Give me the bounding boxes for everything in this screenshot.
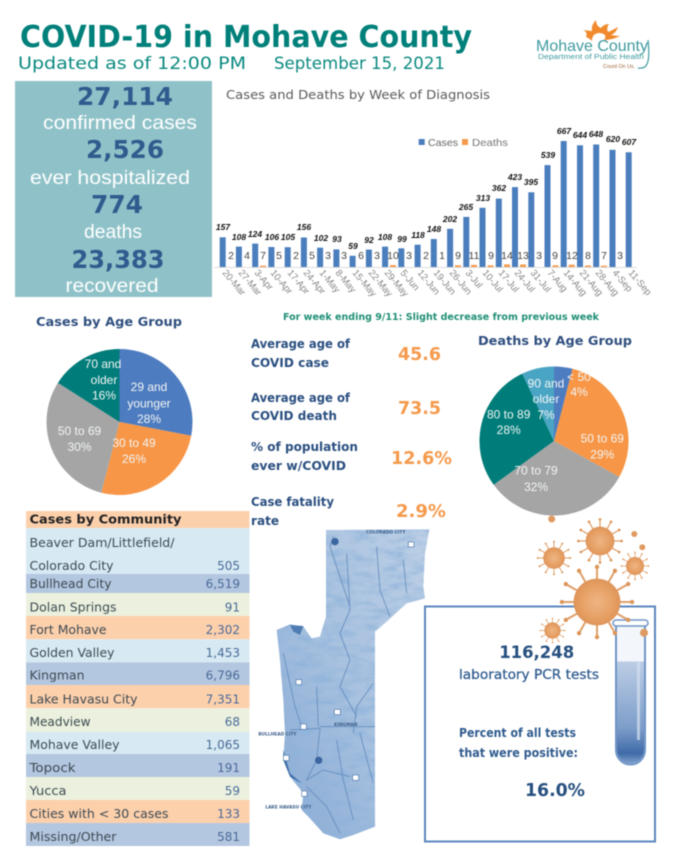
- death value labels: 2: [423, 250, 429, 262]
- case value labels: 423: [507, 172, 522, 182]
- table header: Cases by Community: [30, 512, 182, 526]
- icon: sun: [583, 20, 620, 41]
- pie chart: deaths: 50 to 69: [581, 432, 624, 446]
- title: COVID-19 in Mohave County: [20, 20, 472, 55]
- panel: PCR testing: laboratory PCR tests: [459, 668, 599, 683]
- week axis labels: 24-Jul: [512, 268, 537, 295]
- table rows: Cities with < 30 cases: [30, 807, 168, 821]
- death value labels: 5: [276, 250, 282, 262]
- legend: Deaths: [472, 137, 508, 149]
- panel: key totals: [15, 81, 212, 297]
- panel: key totals: ever hospitalized: [30, 167, 190, 189]
- week axis labels: 20-Mar: [220, 268, 247, 298]
- week axis labels: 17-Apr: [285, 268, 311, 297]
- death bars: [260, 264, 607, 267]
- case value labels: 648: [589, 129, 603, 139]
- week axis labels: 12-Jun: [415, 268, 442, 297]
- table rows: 91: [225, 600, 240, 614]
- pie chart: deaths: 28%: [497, 423, 521, 437]
- place names: LAKE HAVASU CITY: [265, 804, 312, 810]
- table rows: 6,519: [206, 577, 240, 591]
- stat: average age of case: 45.6: [398, 344, 441, 365]
- death value labels: 3: [406, 250, 412, 262]
- case value labels: 362: [492, 183, 506, 193]
- case value labels: 620: [606, 134, 620, 144]
- death value labels: 4: [244, 250, 250, 262]
- case value labels: 124: [248, 229, 262, 239]
- case value labels: 93: [332, 234, 342, 244]
- place names: COLORADO CITY: [366, 530, 406, 536]
- place names: [258, 530, 406, 810]
- case bars: [220, 141, 632, 267]
- case value labels: 99: [397, 234, 407, 244]
- table rows: Lake Havasu City: [30, 692, 138, 706]
- confirmed cases: 27,114: [77, 82, 173, 111]
- deaths: 774: [91, 190, 143, 219]
- pie chart: deaths: 7%: [537, 408, 555, 422]
- case value labels: 313: [476, 193, 490, 203]
- case value labels: 148: [427, 224, 441, 234]
- week axis labels: 29-May: [382, 268, 411, 299]
- table rows: Kingman: [30, 668, 84, 682]
- stat: case fatality rate: 2.9%: [396, 501, 446, 522]
- pie chart: cases: 26%: [122, 452, 146, 466]
- table rows: Mohave Valley: [30, 738, 120, 752]
- pie chart: cases: 50 to 69: [58, 424, 102, 438]
- stat: case fatality rate: Case fatality: [251, 495, 334, 509]
- pie chart: deaths: 29%: [590, 448, 615, 462]
- heading: Cases by Age Group: [36, 314, 182, 329]
- icon: virus particles: [538, 516, 649, 643]
- pie chart: cases: [47, 349, 192, 495]
- death value labels: 6: [358, 250, 364, 262]
- table rows: Colorado City: [30, 559, 114, 573]
- case value labels: 108: [378, 232, 392, 242]
- week axis labels: 7-Aug: [545, 268, 569, 294]
- total tests: 116,248: [499, 643, 574, 663]
- panel: PCR testing: 16.0%: [525, 780, 585, 801]
- stat: case fatality rate: [251, 495, 446, 528]
- table rows: Bullhead City: [30, 577, 112, 591]
- pie chart: cases: 30 to 49: [112, 436, 156, 450]
- week axis labels: 17-Jul: [496, 268, 521, 295]
- case value labels: 202: [442, 214, 457, 224]
- pie chart: cases: 16%: [92, 388, 116, 402]
- pie chart: cases: older: [91, 373, 117, 387]
- panel: key totals: confirmed cases: [43, 112, 197, 134]
- pie chart: deaths: 90 and: [528, 376, 564, 390]
- logo: Mohave County Department of Public Health: [536, 20, 649, 70]
- percent positive: Percent of all tests: [459, 726, 576, 740]
- week axis labels: 15-May: [350, 268, 379, 299]
- recovered: 23,383: [72, 245, 164, 274]
- week axis labels: 26-Jun: [447, 268, 474, 297]
- subtitle: update time: Updated as of 12:00 PM: [18, 54, 246, 74]
- stat: percent ever with COVID: % of population: [251, 440, 358, 454]
- week axis labels: 19-Jun: [431, 268, 458, 297]
- case value labels: 105: [281, 232, 295, 242]
- bar chart: cases and deaths by week: [214, 126, 653, 299]
- death value labels: 7: [601, 250, 607, 262]
- week axis labels: 21-Aug: [577, 268, 605, 298]
- table rows: 1,453: [206, 646, 240, 660]
- table rows: 6,796: [206, 668, 240, 682]
- pie chart: cases: 28%: [137, 412, 161, 426]
- week axis labels: 22-May: [366, 268, 395, 299]
- death value labels: 3: [617, 250, 623, 262]
- death value labels: 7: [260, 250, 266, 262]
- pie chart: deaths: < 50: [567, 370, 591, 384]
- week axis labels: 5-Jun: [398, 268, 421, 293]
- ever hospitalized: 2,526: [86, 135, 164, 164]
- death value labels: 3: [341, 250, 347, 262]
- table rows: 7,351: [206, 692, 240, 706]
- week axis labels: [220, 268, 653, 299]
- stat: average age of death: [251, 391, 441, 423]
- week axis labels: 28-Aug: [593, 268, 621, 298]
- pie chart: deaths: 80 to 89: [487, 408, 531, 422]
- case value labels: 395: [524, 177, 538, 187]
- weekly trend note: For week ending 9/11: Slight decrease from previous week: [283, 312, 600, 323]
- route markers: [283, 542, 414, 796]
- panel: key totals: recovered: [66, 275, 158, 297]
- legend: Cases: [428, 137, 458, 149]
- table rows: 505: [217, 559, 240, 573]
- death value labels: 12: [566, 250, 578, 262]
- chart heading: Cases and Deaths by Week of Diagnosis: [226, 87, 490, 102]
- death value labels: 9: [455, 250, 461, 262]
- stat: percent ever with COVID: ever w/COVID: [251, 459, 346, 473]
- table: cases by community: [26, 511, 250, 846]
- week axis labels: 31-Jul: [528, 268, 553, 295]
- week axis labels: 3-Jul: [463, 268, 484, 291]
- week axis labels: 8-May: [333, 268, 358, 295]
- death value labels: 3: [374, 250, 380, 262]
- stat: average age of death: COVID death: [251, 409, 337, 423]
- case value labels: 118: [411, 230, 425, 240]
- table rows: 581: [217, 830, 240, 844]
- pie chart: cases: 29 and: [131, 380, 167, 394]
- week axis labels: 10-Apr: [268, 268, 294, 297]
- week axis labels: 11-Sep: [626, 268, 653, 298]
- panel: key totals: deaths: [84, 221, 142, 243]
- death value labels: 13: [517, 250, 529, 262]
- case value labels: 607: [622, 137, 637, 147]
- table rows: Golden Valley: [30, 646, 114, 660]
- table rows: Fort Mohave: [30, 623, 106, 637]
- table rows: Missing/Other: [30, 830, 117, 844]
- pie chart: deaths: older: [533, 392, 559, 406]
- stat: average age of case: [251, 337, 441, 370]
- table rows: Dolan Springs: [30, 600, 117, 614]
- case value labels: 157: [216, 222, 231, 232]
- case value labels: 156: [297, 222, 311, 232]
- death value labels: 1: [439, 250, 445, 262]
- logo: Mohave County Department of Public Health: Mohave County: [536, 38, 648, 55]
- table rows: 68: [225, 715, 240, 729]
- week axis labels: 4-Sep: [610, 268, 634, 294]
- stat: average age of case: Average age of: [251, 337, 351, 351]
- case value labels: 265: [458, 202, 473, 212]
- pie chart: deaths: [479, 366, 629, 516]
- death value labels: 9: [552, 250, 558, 262]
- death value labels: 5: [309, 250, 315, 262]
- table rows: Yucca: [28, 784, 67, 798]
- place names: KINGMAN: [334, 722, 358, 728]
- table rows: 2,302: [206, 623, 240, 637]
- pie chart: cases: 30%: [67, 440, 92, 454]
- map: Mohave County terrain: [258, 529, 429, 839]
- pie chart: cases: younger: [127, 396, 171, 410]
- logo: Mohave County Department of Public Health: Count On Us.: [603, 64, 635, 70]
- icon: test tube: [613, 620, 648, 764]
- stat: average age of death: Average age of: [251, 391, 351, 405]
- panel: PCR testing: [425, 606, 655, 842]
- death value labels: 9: [488, 250, 494, 262]
- death value labels: 3: [536, 250, 542, 262]
- case value labels: 108: [232, 232, 246, 242]
- place names: BULLHEAD CITY: [258, 731, 297, 737]
- pie chart: deaths: 4%: [570, 385, 588, 399]
- week axis labels: 1-May: [317, 268, 342, 295]
- death value labels: 14: [501, 250, 513, 262]
- table rows: Topock: [28, 761, 76, 775]
- death value labels: 2: [228, 250, 234, 262]
- death value labels: 11: [469, 250, 480, 262]
- case value labels: 667: [557, 126, 572, 136]
- case value labels: [216, 126, 637, 251]
- case value labels: 92: [364, 235, 374, 245]
- case value labels: 539: [541, 150, 555, 160]
- legend: [419, 137, 508, 149]
- table rows: 59: [225, 784, 240, 798]
- week axis labels: 10-Jul: [480, 268, 505, 295]
- week axis labels: 3-Apr: [252, 268, 275, 293]
- panel: key statistics: [251, 337, 452, 528]
- death value labels: 3: [325, 250, 331, 262]
- heading: Deaths by Age Group: [478, 333, 632, 348]
- week axis labels: 27-Mar: [236, 268, 263, 298]
- table rows: [28, 536, 240, 844]
- death value labels: 10: [387, 250, 399, 262]
- panel: PCR testing: that were positive:: [459, 746, 578, 760]
- subtitle: date: September 15, 2021: [274, 54, 445, 74]
- stat: case fatality rate: rate: [251, 514, 279, 528]
- stat: average age of death: 73.5: [398, 398, 441, 419]
- death value labels: 8: [585, 250, 591, 262]
- case value labels: 106: [265, 232, 279, 242]
- stat: percent ever with COVID: 12.6%: [391, 448, 452, 469]
- week axis labels: 14-Aug: [561, 268, 589, 298]
- case value labels: 59: [348, 241, 358, 251]
- death value labels: 2: [293, 250, 299, 262]
- pie chart: cases: 70 and: [85, 357, 121, 371]
- pie chart: deaths: 32%: [524, 480, 548, 494]
- stat: average age of case: COVID case: [251, 356, 329, 370]
- panel: cases by age group: [36, 314, 192, 495]
- logo: Mohave County Department of Public Health: Department of Public Health: [538, 54, 644, 61]
- table rows: Meadview: [30, 715, 91, 729]
- table rows: 1,065: [206, 738, 240, 752]
- panel: deaths by age group: [478, 333, 632, 516]
- stat: percent ever with COVID: [251, 440, 452, 473]
- table rows: Beaver Dam/Littlefield/: [30, 536, 176, 550]
- case value labels: 644: [573, 130, 587, 140]
- table rows: 191: [217, 761, 240, 775]
- week axis labels: 24-Apr: [301, 268, 327, 297]
- death value labels: [228, 250, 623, 262]
- case value labels: 102: [314, 233, 328, 243]
- pie chart: deaths: 70 to 79: [514, 464, 558, 478]
- table rows: 133: [217, 807, 240, 821]
